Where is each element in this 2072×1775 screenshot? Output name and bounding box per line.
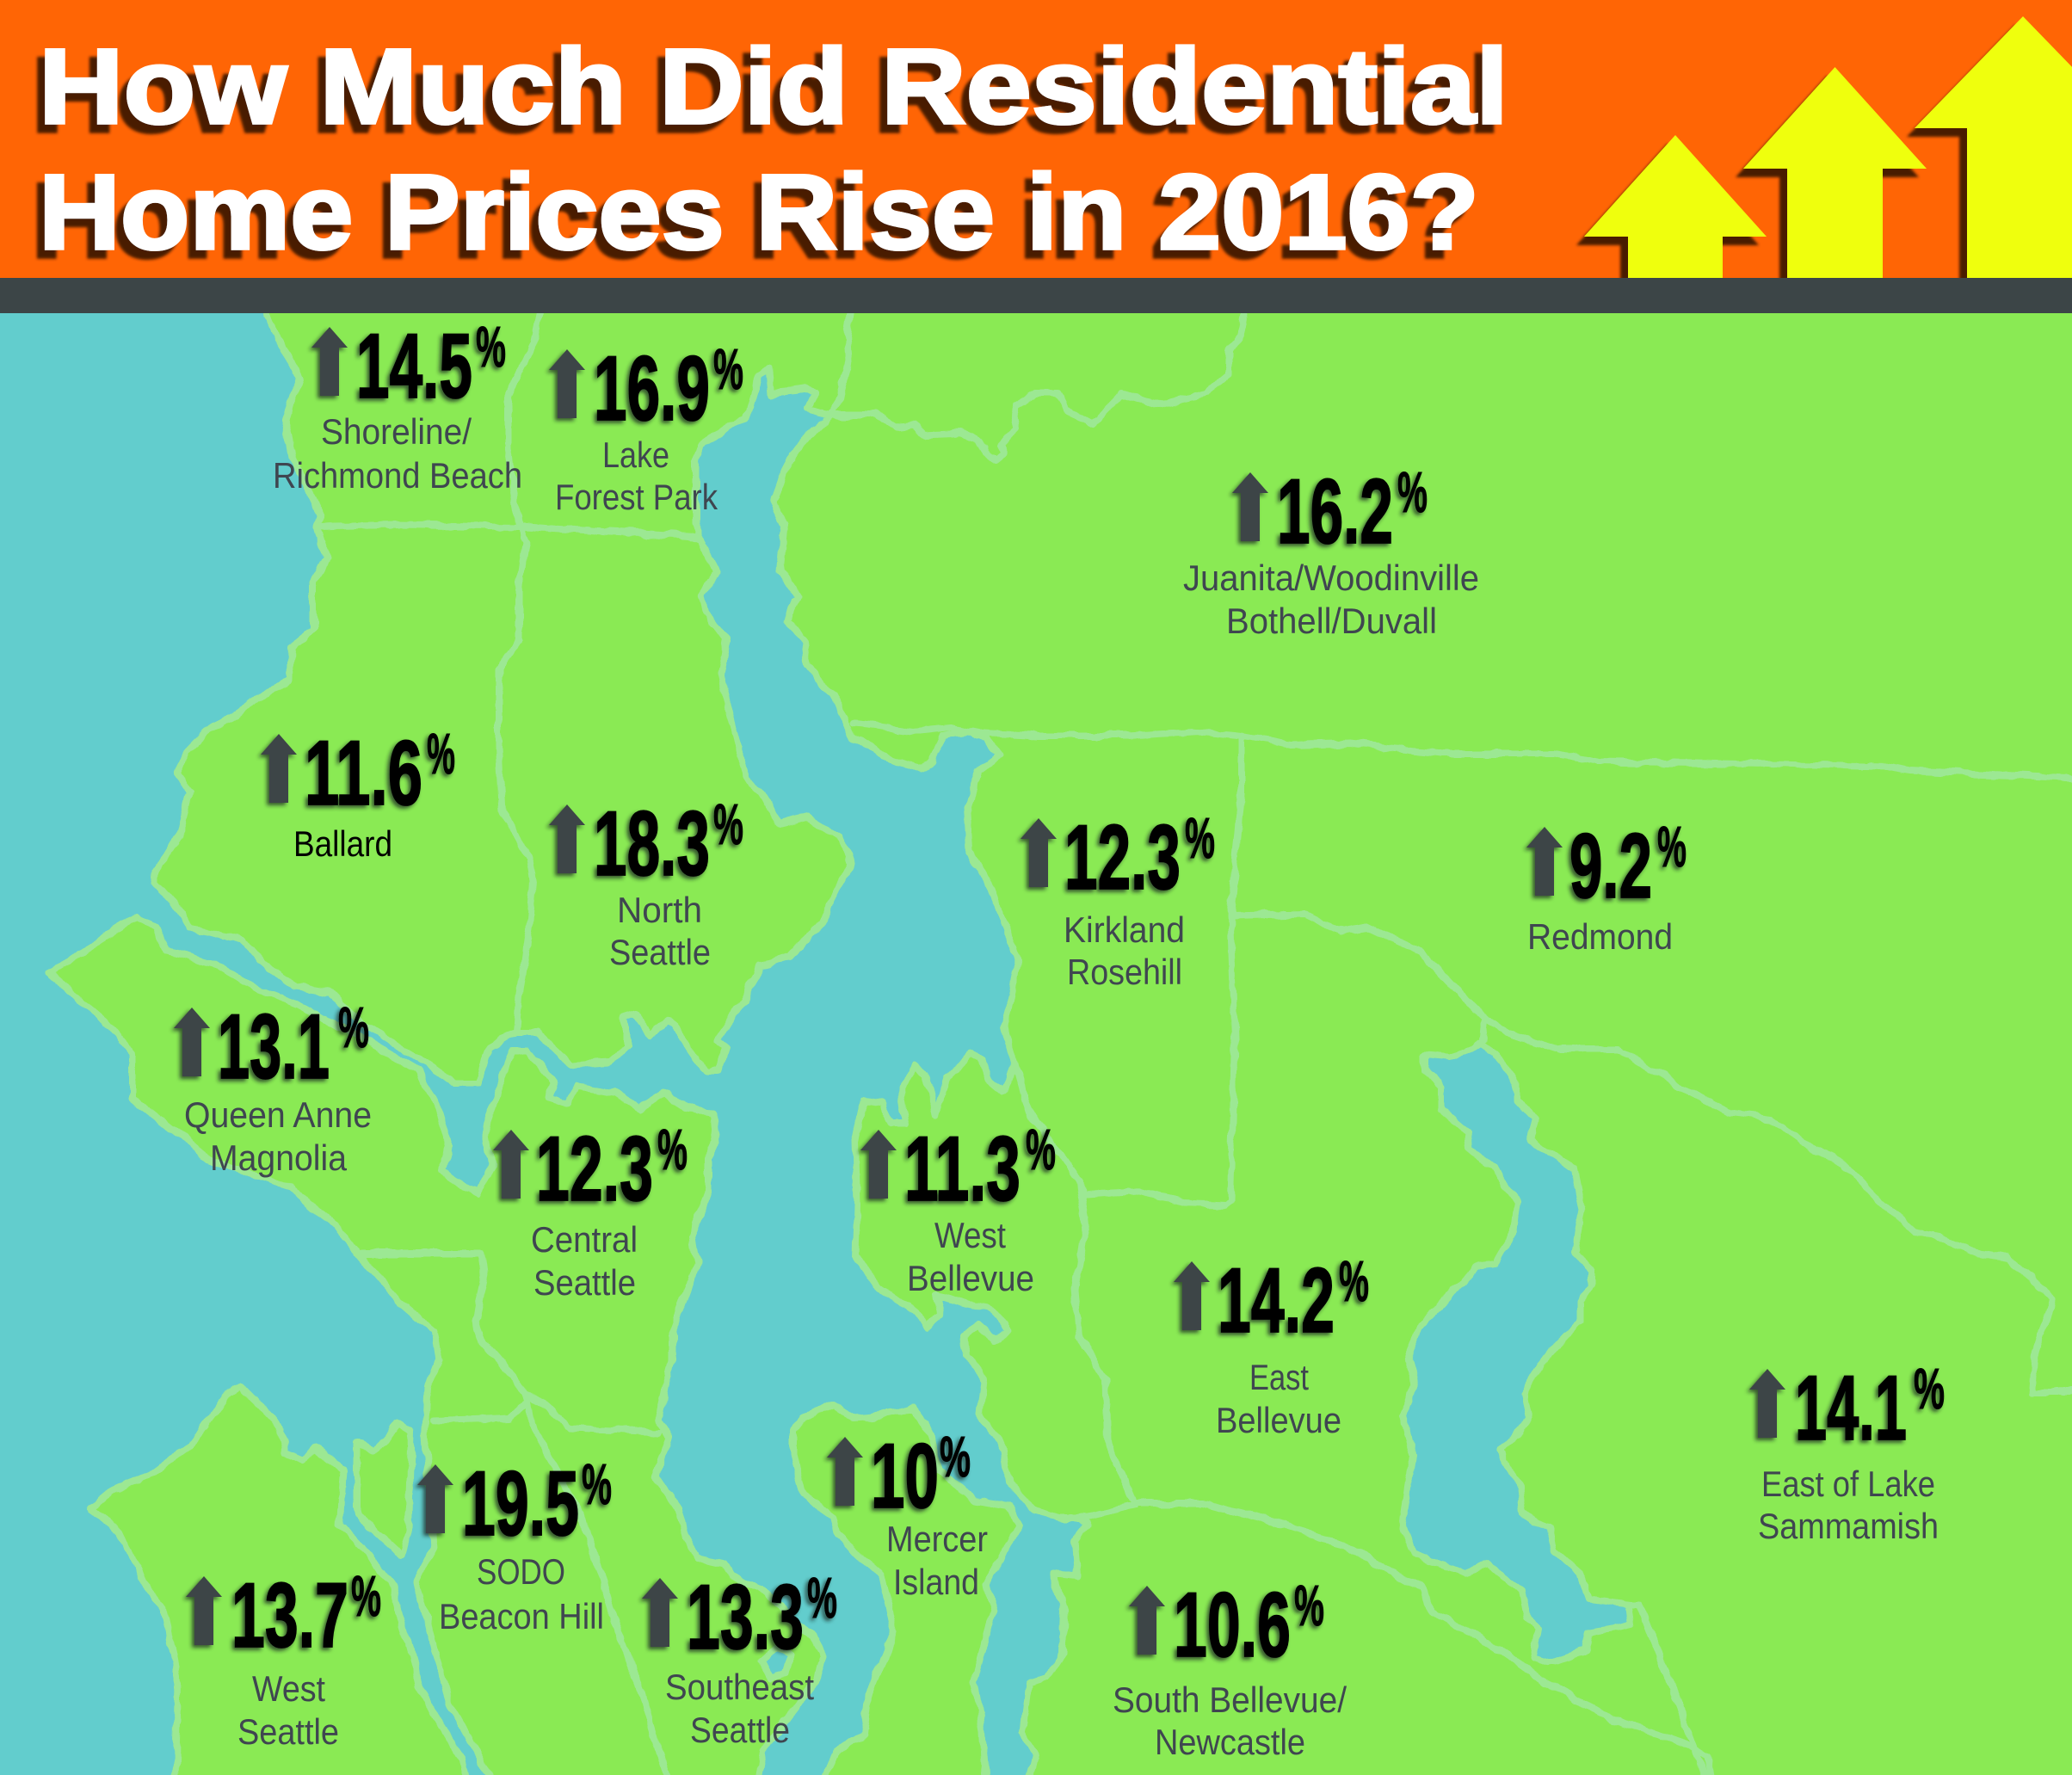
stat: Redmond (1526, 814, 1687, 957)
stat: South Bellevue / Newcastle (1113, 1573, 1347, 1762)
value with arrow: % (1657, 815, 1687, 879)
value with arrow: % (476, 315, 506, 379)
label: Sammamish (1758, 1506, 1939, 1546)
value with arrow: % (1339, 1249, 1369, 1314)
title line 2: Home Prices Rise in 2016? (39, 153, 1479, 272)
value with arrow (311, 314, 506, 417)
label: Bellevue (1216, 1400, 1341, 1440)
lake: Lake Sammamish (1403, 1042, 1632, 1662)
label (1183, 558, 1479, 641)
label: Rosehill (1067, 952, 1182, 992)
label: SODO (477, 1551, 565, 1592)
value with arrow: 11.3 (904, 1117, 1021, 1220)
value with arrow: 16.2 (1277, 459, 1393, 563)
value with arrow: % (713, 337, 743, 402)
stat: East Bellevue (1174, 1248, 1369, 1440)
value with arrow (186, 1563, 381, 1667)
icon: three rising yellow arrows (1584, 16, 2072, 278)
landmass: north Seattle and the Eastside (155, 293, 2072, 1775)
value with arrow (1749, 1356, 1945, 1459)
value with arrow: 13.3 (687, 1565, 804, 1668)
label: Newcastle (1155, 1722, 1305, 1762)
lake: small Seward Park inlet (762, 1648, 792, 1678)
stat: Lake Forest Park (549, 336, 743, 517)
value with arrow (1526, 814, 1687, 917)
stat: Southeast Seattle (642, 1565, 837, 1750)
value with arrow (549, 336, 743, 440)
label (907, 1215, 1034, 1298)
label: Island (893, 1562, 979, 1602)
stat: Juanita / Woodinville / Bothell / Duvall (1183, 459, 1479, 641)
label: Beacon Hill (439, 1596, 604, 1636)
label (531, 1219, 638, 1303)
value with arrow: 14.2 (1218, 1248, 1335, 1352)
label (1758, 1464, 1939, 1546)
stat: North Seattle (549, 792, 743, 972)
stat: West Seattle (186, 1563, 381, 1752)
value with arrow (860, 1117, 1056, 1220)
value with arrow: % (427, 722, 455, 786)
label: Lake (602, 435, 669, 475)
value with arrow: 18.3 (594, 792, 710, 895)
value with arrow: % (338, 995, 369, 1060)
stat: Ballard (261, 721, 455, 864)
stat: East of Lake Sammamish (1749, 1356, 1945, 1546)
label: Central (531, 1219, 638, 1260)
landmass: Queen Anne, Central Seattle, SODO and Southeast Seattle (49, 917, 823, 1775)
stat: Queen Anne / Magnolia (174, 995, 372, 1178)
value with arrow (1129, 1573, 1324, 1676)
landmass: Mercer Island (793, 1405, 1018, 1775)
label: Shoreline/ (321, 411, 472, 452)
label: Ballard (293, 823, 392, 864)
value with arrow: % (582, 1452, 612, 1517)
value with arrow: 19.5 (462, 1451, 579, 1555)
label (273, 411, 522, 496)
value with arrow (1232, 459, 1428, 563)
value with arrow (549, 792, 743, 895)
label: North (617, 890, 702, 930)
value with arrow (493, 1117, 688, 1220)
label: East (1249, 1357, 1309, 1397)
value with arrow: 14.1 (1795, 1356, 1907, 1459)
value with arrow: 14.5 (356, 314, 472, 417)
label: Richmond Beach (273, 455, 522, 496)
value with arrow: % (1914, 1357, 1945, 1421)
value with arrow: % (1294, 1574, 1324, 1638)
icon: small arrow (1584, 135, 1767, 278)
label (184, 1094, 372, 1178)
value with arrow: % (351, 1564, 381, 1629)
label (439, 1551, 604, 1636)
icon: large arrow (1915, 16, 2072, 278)
value with arrow: 10.6 (1174, 1573, 1291, 1676)
value with arrow: 11.6 (305, 721, 422, 824)
value with arrow: 9.2 (1569, 814, 1652, 917)
value with arrow (827, 1424, 971, 1527)
value with arrow: 10 (871, 1424, 939, 1527)
stat: Central Seattle (493, 1117, 688, 1303)
label: Mercer (886, 1519, 988, 1559)
value with arrow: 12.3 (1064, 805, 1181, 909)
label: Juanita/Woodinville (1183, 558, 1479, 598)
title line 1: How Much Did Residential (39, 28, 1508, 146)
stat: Shoreline / Richmond Beach (273, 314, 522, 496)
value with arrow: % (713, 792, 743, 857)
value with arrow: % (940, 1425, 971, 1489)
label: East of Lake (1761, 1464, 1935, 1504)
label: Queen Anne (184, 1094, 372, 1135)
label (555, 435, 718, 517)
label: Bellevue (907, 1258, 1034, 1298)
value with arrow (642, 1565, 837, 1668)
value with arrow (261, 721, 455, 824)
stat: SODO / Beacon Hill (417, 1451, 612, 1636)
label (1113, 1679, 1347, 1762)
label: Redmond (1527, 916, 1673, 957)
stat: Mercer Island (827, 1424, 988, 1602)
label: Magnolia (210, 1137, 348, 1178)
label: West (934, 1215, 1006, 1255)
value with arrow: % (1397, 460, 1428, 525)
label: South Bellevue/ (1113, 1679, 1347, 1720)
label: Forest Park (555, 477, 718, 517)
label (1216, 1357, 1341, 1440)
label: Seattle (609, 932, 711, 972)
label (886, 1519, 988, 1602)
dark divider band (0, 278, 2072, 313)
label (237, 1668, 339, 1752)
label: Southeast (665, 1667, 814, 1707)
stat: Kirkland / Rosehill (1021, 805, 1215, 992)
stat: West Bellevue (860, 1117, 1056, 1298)
value with arrow: % (1026, 1118, 1056, 1182)
title (39, 28, 1508, 272)
label (1064, 909, 1185, 992)
value with arrow: % (807, 1566, 837, 1630)
value with arrow: % (657, 1118, 688, 1182)
value with arrow: 16.9 (594, 336, 710, 440)
value with arrow (1021, 805, 1215, 909)
label (665, 1667, 814, 1750)
header banner (0, 0, 2072, 278)
value with arrow: 13.1 (218, 995, 330, 1098)
value with arrow: 13.7 (231, 1563, 348, 1667)
label: Bothell/Duvall (1226, 601, 1437, 641)
icon: medium arrow (1743, 67, 1927, 278)
value with arrow (174, 995, 369, 1098)
value with arrow (417, 1451, 612, 1555)
label: Seattle (690, 1710, 790, 1750)
landmass: West Seattle (90, 1387, 472, 1775)
neighborhood boundary lines (316, 293, 2072, 1775)
value with arrow: 12.3 (536, 1117, 653, 1220)
value with arrow: % (1185, 806, 1215, 871)
label: Seattle (533, 1262, 636, 1303)
landmass: Harbor Island (357, 1423, 411, 1554)
label: West (252, 1668, 325, 1709)
value with arrow (1174, 1248, 1369, 1352)
label: Kirkland (1064, 909, 1185, 950)
label (609, 890, 711, 972)
label: Seattle (237, 1711, 339, 1752)
